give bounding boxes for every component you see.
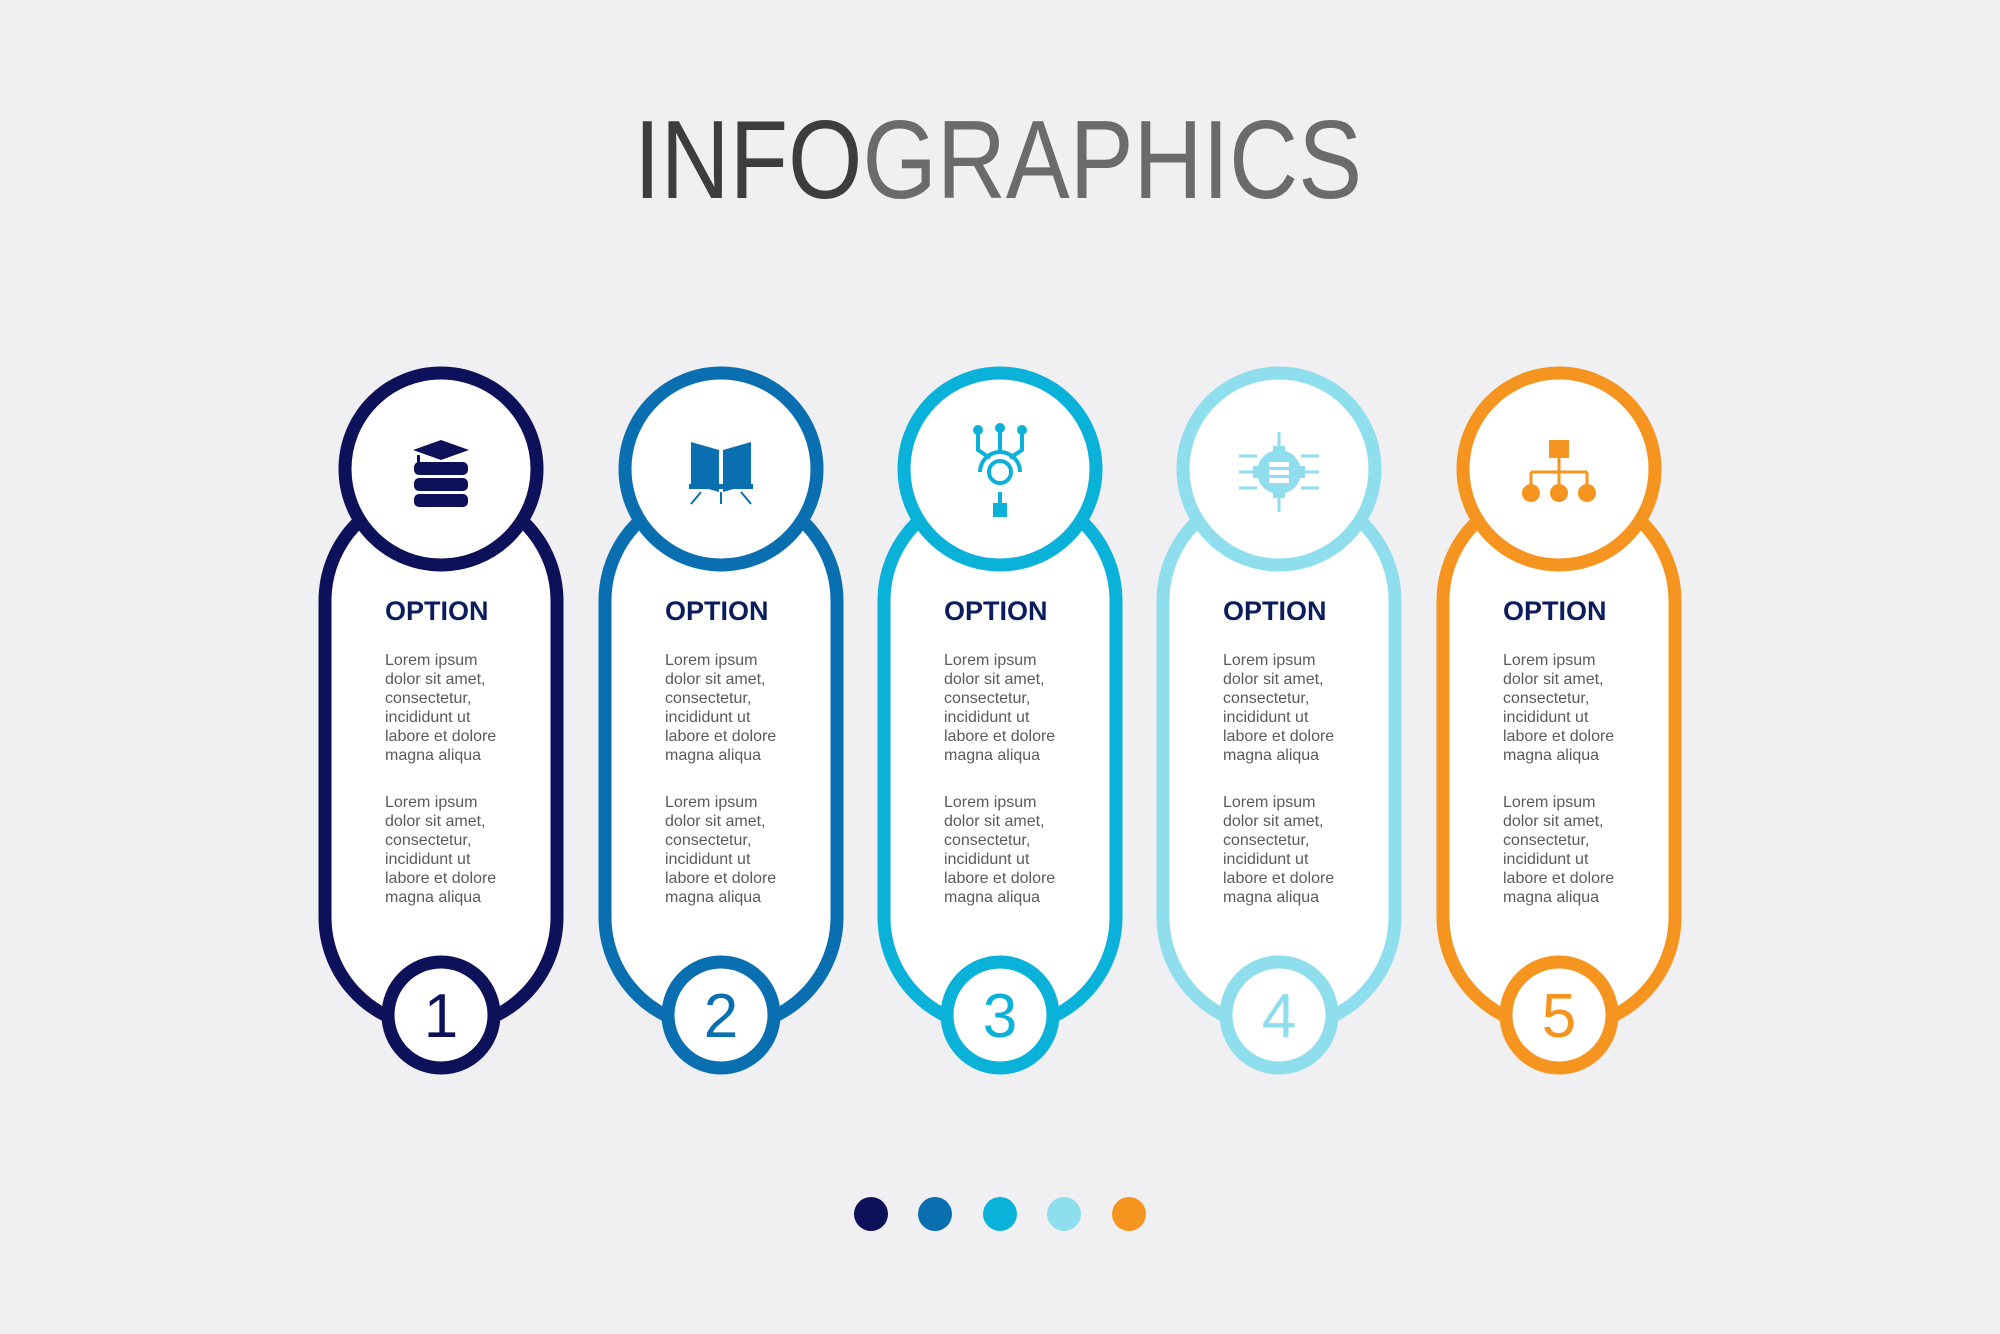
- panel: option 1: OPTION: [385, 596, 489, 626]
- panel: option 1: magna aliqua: [385, 747, 481, 764]
- panel: option 2: OPTION: [665, 596, 769, 626]
- panel: option 1: incididunt ut: [385, 851, 471, 868]
- panel: option 3: 3: [983, 982, 1017, 1051]
- icon: database with graduation cap: [413, 440, 469, 507]
- panel: option 2: consectetur,: [665, 832, 751, 849]
- panel: option 2: incididunt ut: [665, 851, 751, 868]
- icon: gear server network: [1239, 432, 1319, 512]
- panel: option 5: OPTION: [1503, 596, 1607, 626]
- panel: option 5: [1443, 373, 1675, 1068]
- panel: option 4: OPTION: [1223, 596, 1327, 626]
- panel: option 4: [1163, 373, 1395, 1068]
- panel: option 3: magna aliqua: [944, 889, 1040, 906]
- panel: option 5: dolor sit amet,: [1503, 813, 1603, 830]
- panel: option 3: Lorem ipsum: [944, 794, 1036, 811]
- panel: option 1: dolor sit amet,: [385, 813, 485, 830]
- panel: option 5: consectetur,: [1503, 690, 1589, 707]
- panel: option 4: consectetur,: [1223, 690, 1309, 707]
- panel: option 1: magna aliqua: [385, 889, 481, 906]
- panel: option 3: labore et dolore: [944, 870, 1055, 887]
- panel: option 5: 5: [1542, 982, 1576, 1051]
- panel: option 4: labore et dolore: [1223, 870, 1334, 887]
- panel: option 2: 2: [704, 982, 738, 1051]
- panel: option 5: magna aliqua: [1503, 889, 1599, 906]
- panel: option 2: [605, 373, 837, 1068]
- panel: option 2: magna aliqua: [665, 747, 761, 764]
- panel: option 1: labore et dolore: [385, 728, 496, 745]
- panel: option 1: consectetur,: [385, 832, 471, 849]
- panel: option 4: labore et dolore: [1223, 728, 1334, 745]
- panel: option 4: dolor sit amet,: [1223, 671, 1323, 688]
- panel: option 1: consectetur,: [385, 690, 471, 707]
- panel: option 2: Lorem ipsum: [665, 794, 757, 811]
- panel: option 5: Lorem ipsum: [1503, 794, 1595, 811]
- panel: option 1: labore et dolore: [385, 870, 496, 887]
- panel: option 3: OPTION: [944, 596, 1048, 626]
- panel: option 1: Lorem ipsum: [385, 652, 477, 669]
- panel: option 3: labore et dolore: [944, 728, 1055, 745]
- panel: option 3: incididunt ut: [944, 709, 1030, 726]
- panel: option 2: magna aliqua: [665, 889, 761, 906]
- panel: option 1: Lorem ipsum: [385, 794, 477, 811]
- panel: option 5: Lorem ipsum: [1503, 652, 1595, 669]
- panel: option 4: consectetur,: [1223, 832, 1309, 849]
- panel: option 4: Lorem ipsum: [1223, 652, 1315, 669]
- panel: option 3: consectetur,: [944, 690, 1030, 707]
- panel: option 3: Lorem ipsum: [944, 652, 1036, 669]
- panel: option 1: dolor sit amet,: [385, 671, 485, 688]
- panel: option 5: incididunt ut: [1503, 851, 1589, 868]
- panel: option 4: incididunt ut: [1223, 709, 1309, 726]
- panel: option 5: incididunt ut: [1503, 709, 1589, 726]
- panel: option 3: [884, 373, 1116, 1068]
- panel: option 4: 4: [1262, 982, 1296, 1051]
- panel: option 4: Lorem ipsum: [1223, 794, 1315, 811]
- title: INFOGRAPHICS: [634, 98, 1362, 222]
- panel: option 2: consectetur,: [665, 690, 751, 707]
- panel: option 2: labore et dolore: [665, 728, 776, 745]
- panel: option 2: dolor sit amet,: [665, 813, 765, 830]
- panel: option 1: [325, 373, 557, 1068]
- panel: option 3: dolor sit amet,: [944, 813, 1044, 830]
- icon: book with brain: [689, 442, 753, 504]
- panel: option 3: incididunt ut: [944, 851, 1030, 868]
- panel: option 4: magna aliqua: [1223, 747, 1319, 764]
- panel: option 1: incididunt ut: [385, 709, 471, 726]
- panel: option 3: consectetur,: [944, 832, 1030, 849]
- panel: option 5: labore et dolore: [1503, 728, 1614, 745]
- panel: option 2: Lorem ipsum: [665, 652, 757, 669]
- icon: gear with circuit: [978, 430, 1022, 505]
- panel: option 4: incididunt ut: [1223, 851, 1309, 868]
- panel: option 5: dolor sit amet,: [1503, 671, 1603, 688]
- panel: option 5: labore et dolore: [1503, 870, 1614, 887]
- panel: option 4: dolor sit amet,: [1223, 813, 1323, 830]
- panel: option 2: dolor sit amet,: [665, 671, 765, 688]
- panel: option 3: dolor sit amet,: [944, 671, 1044, 688]
- icon: hierarchy: [1522, 440, 1596, 502]
- panel: option 1: 1: [424, 982, 458, 1051]
- panel: option 5: consectetur,: [1503, 832, 1589, 849]
- panel: option 2: labore et dolore: [665, 870, 776, 887]
- panel: option 3: magna aliqua: [944, 747, 1040, 764]
- legend dots: [854, 1197, 1146, 1231]
- panel: option 5: magna aliqua: [1503, 747, 1599, 764]
- panel: option 4: magna aliqua: [1223, 889, 1319, 906]
- panel: option 2: incididunt ut: [665, 709, 751, 726]
